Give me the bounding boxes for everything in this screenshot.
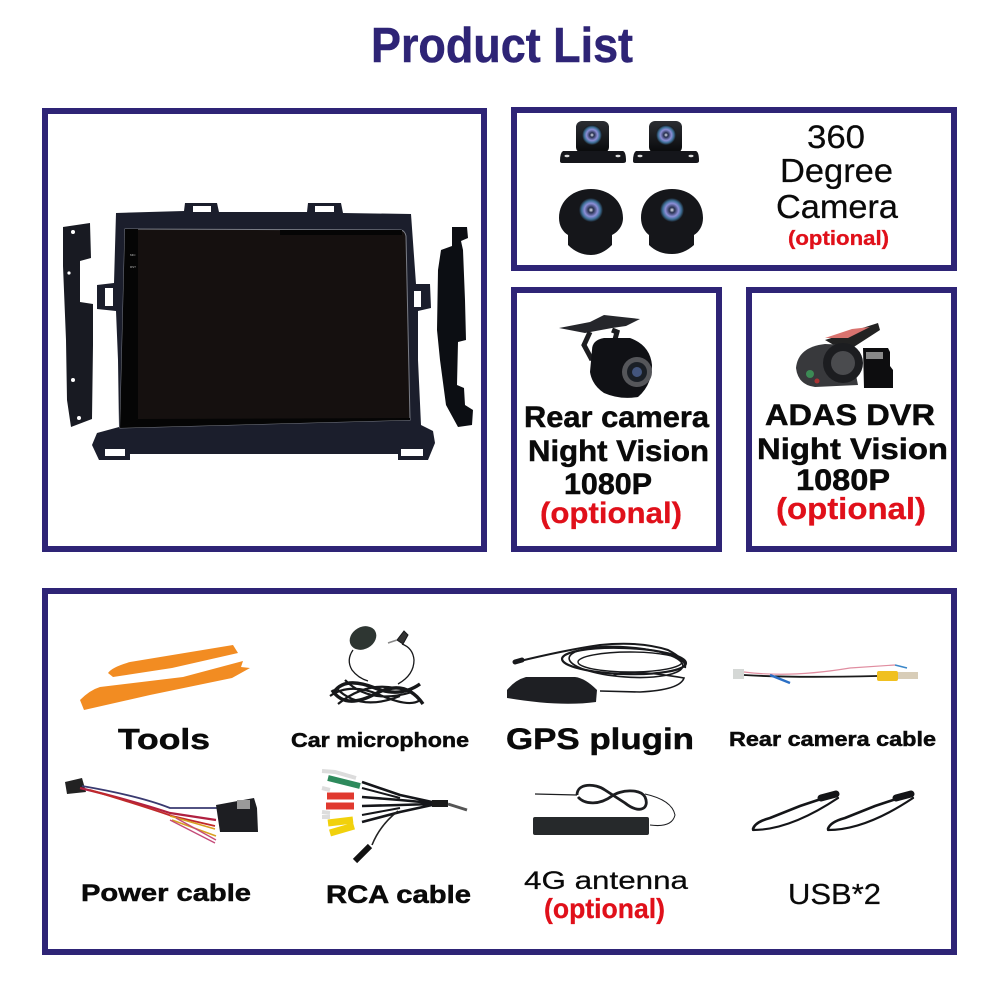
label: tools: Tools <box>118 724 210 756</box>
label: 4G antenna optional: (optional) <box>544 893 665 924</box>
text: 360 degree camera: 360 <box>807 119 865 155</box>
panel: ADAS DVR <box>749 290 954 549</box>
text: rear camera: Night Vision <box>528 435 709 468</box>
title: Product List <box>371 19 633 73</box>
text: 360 degree camera: (optional) <box>788 228 889 250</box>
text: rear camera: Rear camera <box>524 401 709 434</box>
icon: pry tools <box>80 645 250 710</box>
icon: right side bracket <box>437 227 473 427</box>
icon: screen <box>120 229 410 428</box>
label: rear camera cable: Rear camera cable <box>729 729 936 751</box>
icon: DVR and memory card <box>796 323 893 388</box>
icon: rear camera <box>559 315 652 398</box>
label: 4G antenna: 4G antenna <box>524 867 688 895</box>
label: GPS plugin: GPS plugin <box>506 723 694 756</box>
label: USB*2: USB*2 <box>788 879 881 911</box>
text: 360 degree camera: Camera <box>776 188 899 225</box>
icon: power cable <box>65 778 258 843</box>
icon: head unit frame: RST <box>130 265 136 269</box>
text: ADAS DVR: ADAS DVR <box>765 399 935 432</box>
text: 360 degree camera <box>776 119 899 250</box>
icon: head unit frame <box>92 203 435 460</box>
panel: rear camera <box>514 290 719 549</box>
text: ADAS DVR <box>757 399 948 526</box>
icon: USB cables <box>753 794 913 830</box>
icon: head unit frame: MIC <box>130 253 136 257</box>
text: 360 degree camera: Degree <box>780 152 893 189</box>
icon: RCA cable <box>322 771 467 861</box>
label: power cable: Power cable <box>81 880 251 907</box>
panel: 360 degree camera <box>514 110 954 268</box>
panel: accessories <box>45 591 954 952</box>
icon: GPS plugin <box>507 643 686 704</box>
icon: flat mount cameras <box>560 121 699 163</box>
icon: 4G antenna <box>533 785 675 835</box>
icon: rear camera cable <box>733 665 918 683</box>
label: RCA cable: RCA cable <box>326 881 471 909</box>
text: rear camera: (optional) <box>540 497 682 530</box>
icon: dome cameras <box>559 189 703 255</box>
icon: car microphone <box>330 621 423 704</box>
icon: left side bracket <box>63 223 93 427</box>
text: ADAS DVR: Night Vision <box>757 433 948 466</box>
panel: head unit <box>45 111 484 549</box>
text: rear camera: 1080P <box>564 468 652 501</box>
text: rear camera <box>524 401 709 530</box>
text: ADAS DVR: (optional) <box>776 491 926 526</box>
label: car microphone: Car microphone <box>291 730 469 752</box>
text: ADAS DVR: 1080P <box>796 464 890 497</box>
